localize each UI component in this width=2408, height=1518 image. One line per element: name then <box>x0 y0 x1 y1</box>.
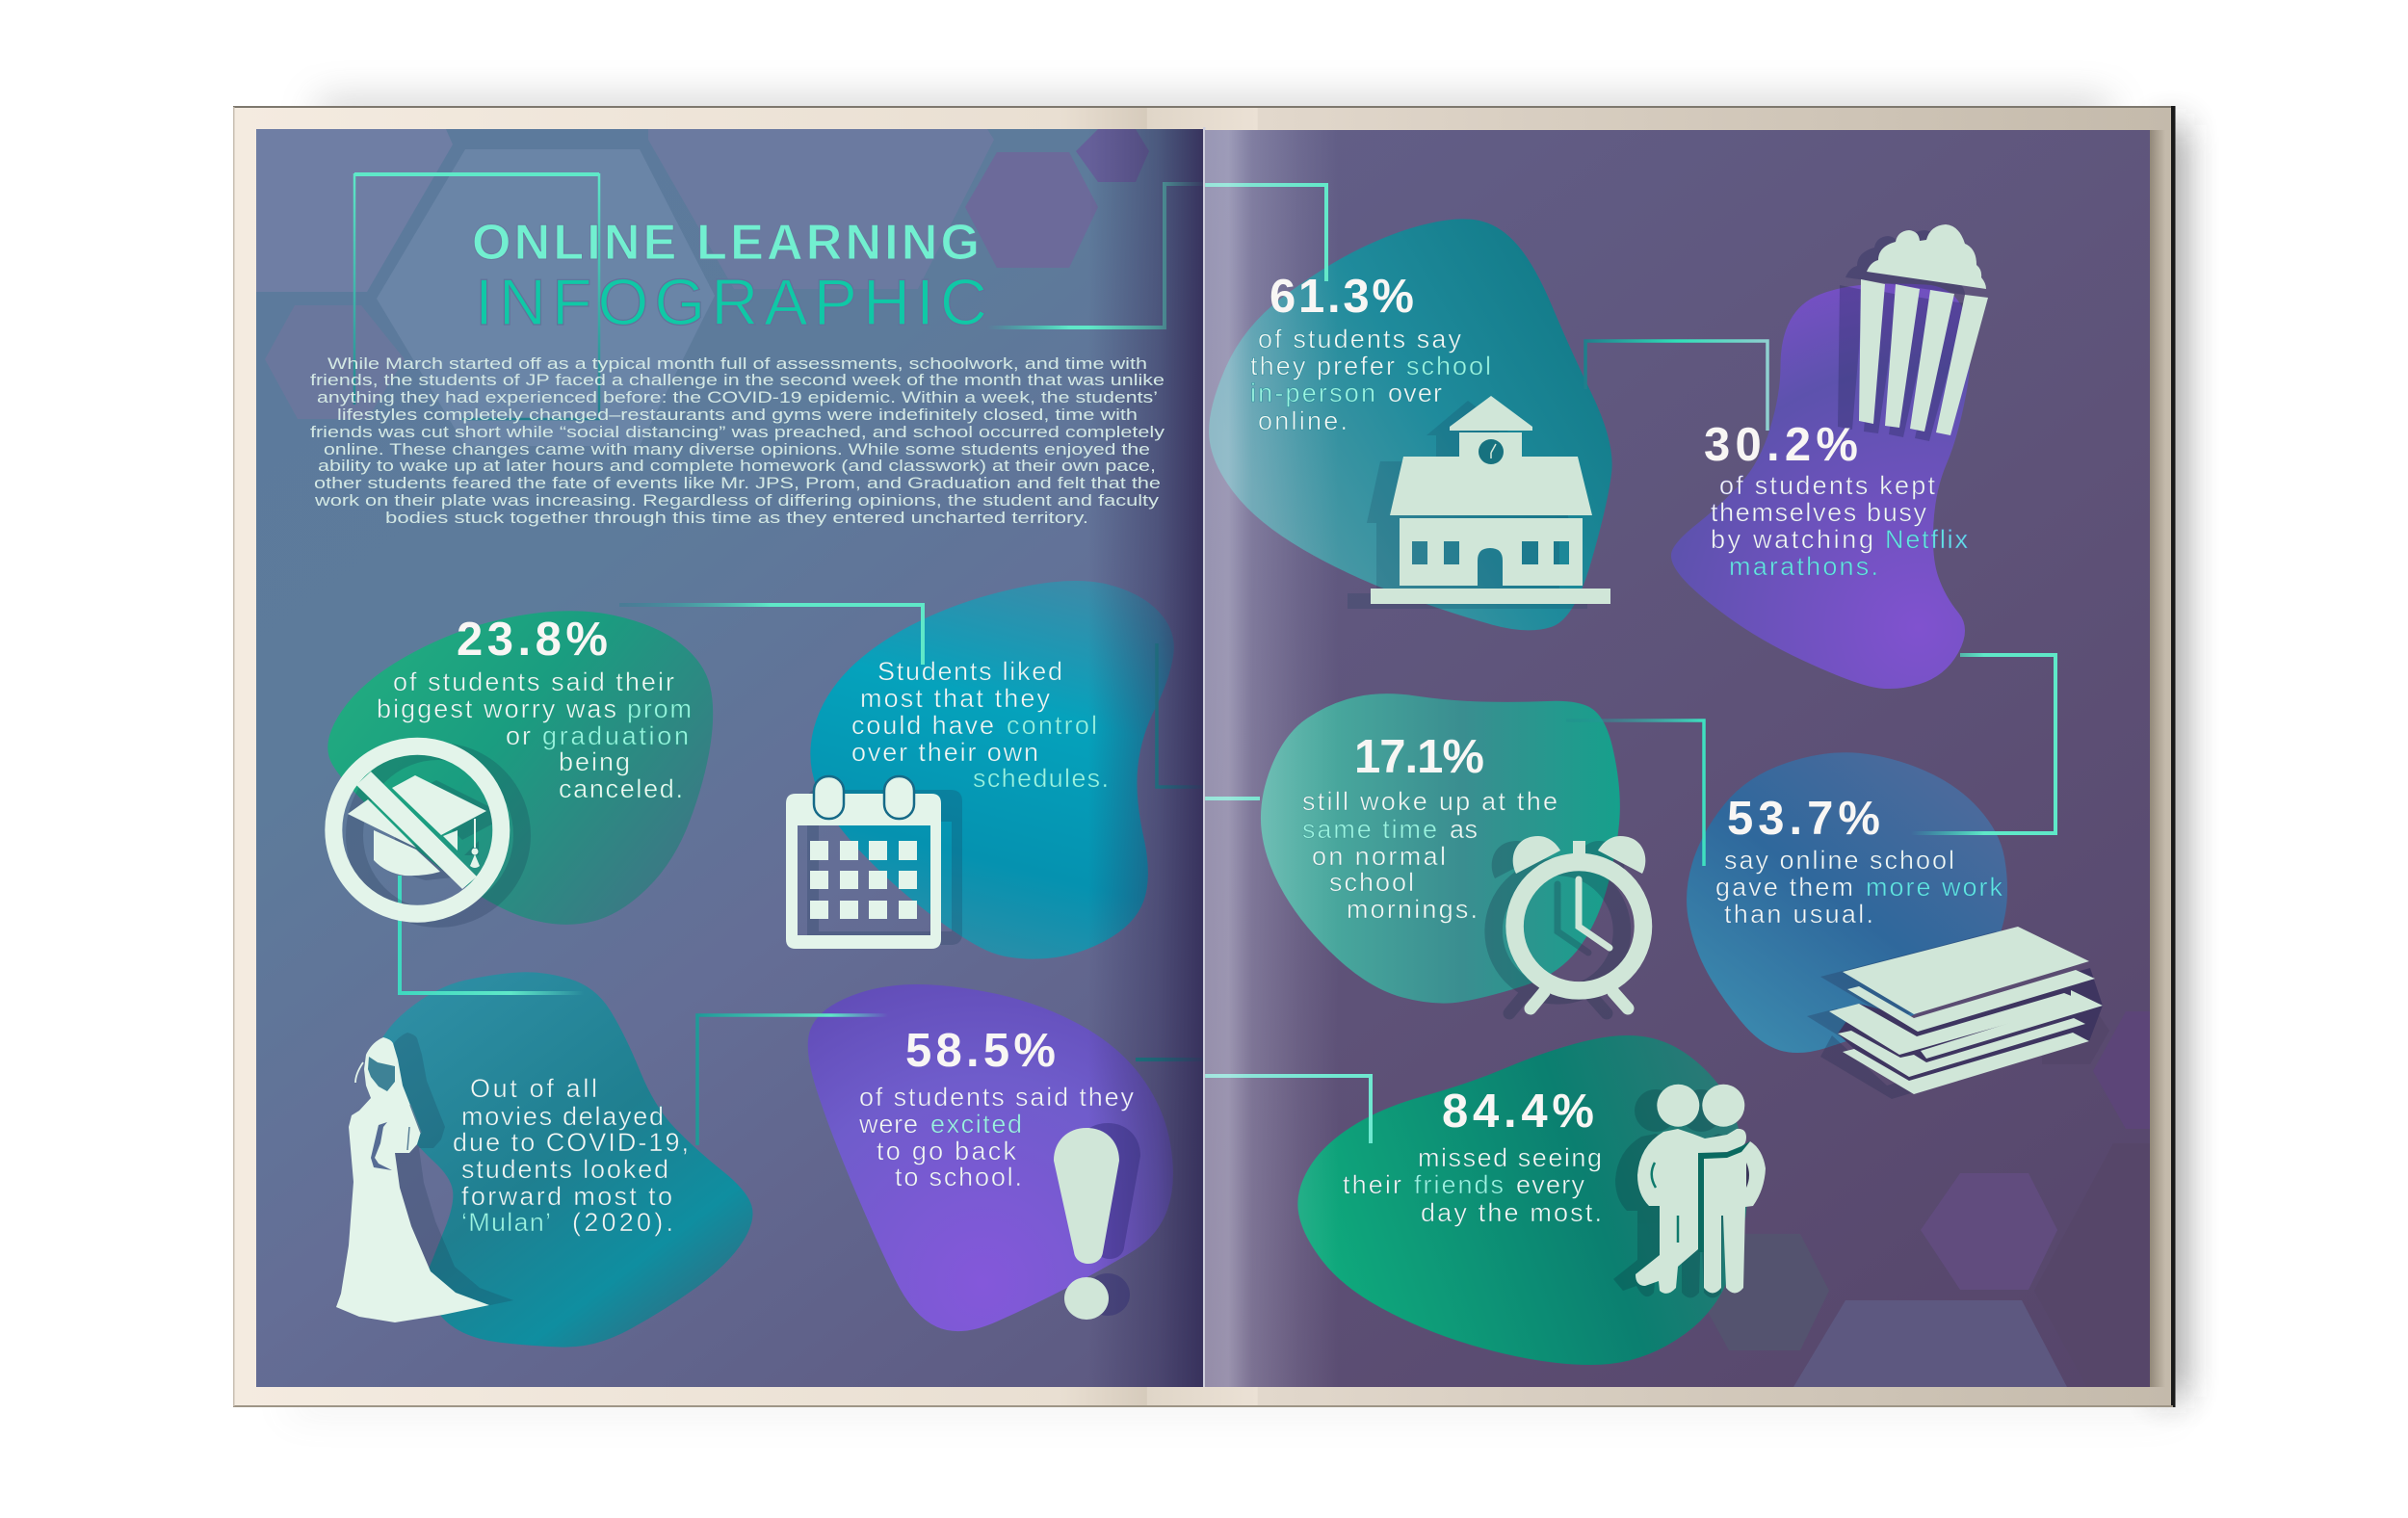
intro paragraph: ability to wake up at later hours and complete homework (and classwork) at their own pace, <box>318 458 1156 475</box>
popcorn kernels <box>1867 224 1986 289</box>
text: students liked control: schedules. <box>973 764 1109 793</box>
stat: 58.5% excited: excited <box>930 1110 1022 1138</box>
stat: 53.7% more work: gave them <box>1715 873 1853 902</box>
papers shadow <box>1807 931 2067 1099</box>
stat: 58.5% excited <box>858 1025 1135 1191</box>
stat: 23.8% prom worry: or <box>506 721 531 750</box>
stat: 58.5% excited: were <box>858 1110 918 1138</box>
calendar body <box>786 794 941 949</box>
text: Mulan: due to COVID-19, <box>453 1128 689 1157</box>
text: Mulan: ‘Mulan’ <box>461 1208 551 1237</box>
bride shadow <box>360 1033 513 1318</box>
icon: alarm clock <box>1492 836 1645 1013</box>
stat: 30.2% Netflix: by watching <box>1711 525 1873 554</box>
stat: 53.7% more work: than usual. <box>1724 900 1873 929</box>
sheet 4 <box>1838 1018 2085 1077</box>
stat: 23.8% prom worry: being <box>559 747 630 776</box>
stat: 23.8% prom worry: prom <box>627 694 692 723</box>
spine gutter line <box>1203 127 1206 1387</box>
clock on tower <box>1479 439 1504 464</box>
stat: 84.4% friends <box>1343 1086 1602 1227</box>
ring <box>333 746 501 914</box>
stat: 17.1% same time: on normal <box>1312 842 1446 871</box>
exclamation body <box>1054 1128 1119 1264</box>
text: students liked control: Students liked <box>877 657 1062 686</box>
stat: 61.3% in-person: over <box>1388 379 1442 407</box>
school body <box>1371 396 1610 604</box>
title <box>472 215 987 339</box>
icon: school building <box>1348 396 1610 609</box>
icon: calendar <box>786 776 962 949</box>
stat: 61.3% in-person: 61.3% <box>1269 271 1414 323</box>
text: Mulan: (2020). <box>572 1208 673 1237</box>
text: Mulan: Out of all <box>470 1074 597 1103</box>
stat: 84.4% friends: friends <box>1414 1170 1504 1199</box>
sheet 3 lower <box>1921 990 2103 1059</box>
panel: right page <box>1204 130 2150 1387</box>
blob: prom worry <box>327 611 713 925</box>
cap <box>348 775 486 876</box>
stat: 61.3% in-person: of students say <box>1258 325 1462 353</box>
blob: netflix <box>1671 284 1971 689</box>
intro paragraph: While March started off as a typical month full of assessments, schoolwork, and time with <box>327 355 1147 373</box>
intro paragraph: work on their plate was increasing. Regardless of differing opinions, the student and faculty <box>314 492 1160 510</box>
stat: 58.5% excited: of students said they <box>859 1083 1135 1112</box>
text: Mulan: forward most to <box>461 1182 672 1211</box>
sheet 1 <box>1843 927 2089 1014</box>
icon shadow <box>354 751 522 919</box>
date grid <box>810 841 917 919</box>
hexagon pattern right <box>1696 1002 2150 1387</box>
arm shadow band <box>1698 1141 1750 1252</box>
sheet 3 upper <box>1829 993 2079 1055</box>
book shadow <box>289 100 2181 1410</box>
stat: 30.2% Netflix: of students kept <box>1719 471 1935 500</box>
stat: 23.8% prom worry <box>377 614 692 803</box>
panel: left page <box>256 129 1204 1387</box>
text: Mulan <box>453 1074 689 1237</box>
icon: no graduation <box>333 746 522 919</box>
stat: 30.2% Netflix <box>1704 419 1969 581</box>
intro paragraph: lifestyles completely changed–restaurants and gyms were indefinitely closed, time with <box>337 406 1138 424</box>
intro paragraph: anything they had experienced before: the COVID-19 epidemic. Within a week, the students’ <box>317 389 1158 406</box>
popcorn stripes <box>1859 279 1988 435</box>
blob: more work <box>1687 752 2007 1053</box>
left details <box>1652 1163 1678 1243</box>
intro paragraph <box>310 355 1165 527</box>
intro paragraph: friends, the students of JP faced a challenge in the second week of the month that was unlike <box>310 372 1165 389</box>
stat: 23.8% prom worry: graduation <box>542 721 689 750</box>
stat: 17.1% same time: same time <box>1302 815 1437 844</box>
bells <box>1513 836 1560 874</box>
stat: 30.2% Netflix: 30.2% <box>1704 419 1858 471</box>
clock shadow <box>1492 841 1624 1013</box>
intro paragraph: other students feared the fate of events like Mr. JPS, Prom, and Graduation and felt that the <box>314 475 1161 492</box>
right person <box>1702 1085 1766 1293</box>
stat: 30.2% Netflix: Netflix <box>1885 525 1969 554</box>
title line 1: ONLINE LEARNING <box>472 215 980 271</box>
stat: 84.4% friends: 84.4% <box>1442 1086 1594 1138</box>
text: students liked control <box>851 657 1109 793</box>
hands <box>1579 879 1610 948</box>
spine shade left page <box>1088 129 1204 1387</box>
intro paragraph: friends was cut short while “social distancing” was preached, and school occurred completely <box>310 424 1165 441</box>
stat: 17.1% same time <box>1302 731 1557 924</box>
exclamation dot <box>1064 1277 1109 1320</box>
stat: 84.4% friends: every <box>1516 1170 1585 1199</box>
blob: excited <box>808 984 1173 1331</box>
connector lines <box>354 173 2055 1145</box>
knob <box>1573 841 1585 856</box>
hexagon pattern left <box>256 129 1149 446</box>
text: Mulan: movies delayed <box>461 1102 664 1131</box>
stat: 84.4% friends: day the most. <box>1421 1198 1602 1227</box>
icon: popcorn <box>1838 224 1988 441</box>
stat: 84.4% friends: their <box>1343 1170 1401 1199</box>
intro paragraph: online. These changes came with many diverse opinions. While some students enjoyed the <box>324 441 1150 458</box>
right arm gap <box>1746 1163 1749 1188</box>
calendar shadow <box>807 790 962 945</box>
friends shadow <box>1613 1089 1743 1298</box>
stat: 17.1% same time: still woke up at the <box>1302 787 1557 816</box>
stat: 61.3% in-person: in-person <box>1250 379 1375 407</box>
stat: 61.3% in-person <box>1250 271 1491 435</box>
face cutout <box>368 1057 395 1091</box>
text: students liked control: could have <box>851 711 994 740</box>
blob: schedules <box>810 581 1174 959</box>
stat: 17.1% same time: mornings. <box>1347 895 1478 924</box>
stat: 30.2% Netflix: themselves busy <box>1711 498 1926 527</box>
spine highlight right page <box>1206 130 1339 1387</box>
stat: 58.5% excited: 58.5% <box>905 1025 1056 1077</box>
intro paragraph: bodies stuck together through this time as they entered uncharted territory. <box>385 510 1088 527</box>
school shadow <box>1348 401 1587 609</box>
icon: exclamation mark <box>1054 1123 1140 1320</box>
icon: bride silhouette <box>336 1033 513 1322</box>
stat: 23.8% prom worry: of students said their <box>393 667 674 696</box>
book cover <box>233 106 2175 1407</box>
sheet 2 <box>1847 970 2095 1032</box>
arm gap <box>371 1122 392 1170</box>
sheet 5 <box>1843 1033 2089 1094</box>
legs <box>1531 992 1628 1008</box>
stat: 53.7% more work: 53.7% <box>1727 793 1880 845</box>
stat: 23.8% prom worry: 23.8% <box>457 614 608 666</box>
text: students liked control: control <box>1007 711 1097 740</box>
stat: 61.3% in-person: online. <box>1258 406 1348 435</box>
blob: movies <box>374 972 752 1348</box>
bride figure <box>336 1037 489 1322</box>
stat: 23.8% prom worry: canceled. <box>559 774 683 803</box>
stat: 30.2% Netflix: marathons. <box>1729 552 1878 581</box>
popcorn shadow <box>1838 230 1967 441</box>
stat: 84.4% friends: missed seeing <box>1418 1143 1602 1172</box>
dark gaps <box>1838 968 2103 1090</box>
stat: 53.7% more work: say online school <box>1724 846 1954 875</box>
exclamation shadow <box>1075 1123 1140 1316</box>
stat: 61.3% in-person: school <box>1406 352 1491 380</box>
blob: school <box>1209 219 1612 630</box>
stat: 23.8% prom worry: biggest worry was <box>377 694 616 723</box>
hair and sleeve lines <box>407 1105 421 1150</box>
stat: 17.1% same time: school <box>1329 868 1414 897</box>
left person <box>1636 1085 1746 1294</box>
rings <box>814 776 844 819</box>
stat: 17.1% same time: 17.1% <box>1354 731 1484 783</box>
icon: two friends <box>1613 1085 1766 1298</box>
stat: 58.5% excited: to school. <box>895 1163 1022 1191</box>
stat: 17.1% same time: as <box>1450 815 1478 844</box>
clock ring <box>1515 862 1643 990</box>
blob: same time <box>1261 694 1620 1004</box>
text: students liked control: most that they <box>860 684 1050 713</box>
icon: stack of papers <box>1807 927 2103 1099</box>
stat: 61.3% in-person: they prefer <box>1250 352 1395 380</box>
blob: friends <box>1297 1035 1748 1365</box>
stat: 58.5% excited: to go back <box>877 1137 1017 1165</box>
stat: 53.7% more work: more work <box>1866 873 2003 902</box>
slash <box>356 772 477 889</box>
text: Mulan: students looked <box>461 1155 668 1184</box>
stat: 53.7% more work <box>1715 793 2003 929</box>
title line 2: INFOGRAPHIC <box>475 266 987 339</box>
text: students liked control: over their own <box>851 738 1038 767</box>
